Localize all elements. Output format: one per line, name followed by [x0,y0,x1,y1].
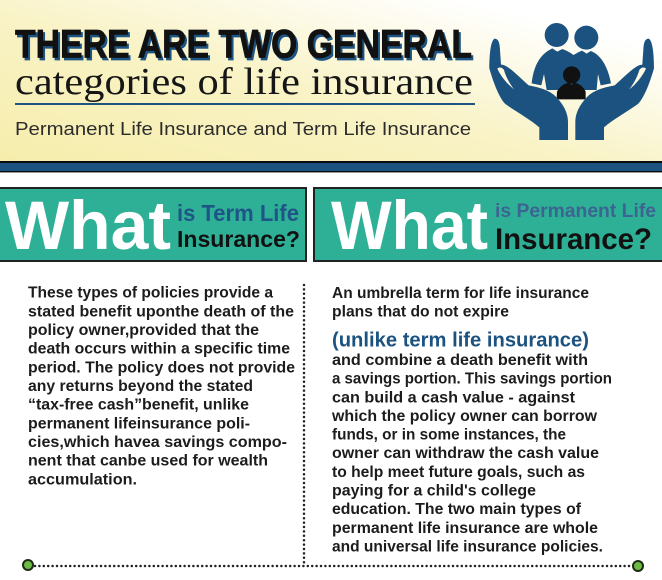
icon: family held in hands [489,23,654,140]
text block: permanent life description: to help meet future goals, such as [332,464,585,481]
panel: what is term life insurance: What [5,187,171,264]
title: THERE ARE TWO GENERAL [17,25,474,69]
text block: permanent life description: An umbrella term for life insurance [332,285,589,302]
left green dot [23,560,33,570]
text block: permanent life description: education. The two main types of [332,501,582,518]
text block: term life description: nent that canbe used for wealth [28,453,268,470]
text block: term life description: period. The policy does not provide [28,359,295,376]
text block: permanent life description: a savings portion. This savings portion [332,371,612,388]
vertical dotted divider [303,285,305,566]
panel: what is permanent life insurance: Insurance? [495,223,652,256]
text block: term life description: policy owner,provided that the [28,322,259,339]
text block: permanent life description: permanent life insurance are whole [332,520,598,537]
text block: term life description: These types of policies provide a [28,285,273,302]
title: THERE ARE TWO GENERAL [15,22,472,66]
right green dot [633,561,643,571]
text block: term life description: death occurs within a specific time [28,341,290,358]
title [15,22,474,103]
panel: what is term life insurance [0,187,306,264]
text block: permanent life description [331,285,612,556]
header background [0,0,662,161]
text block: term life description: any returns beyond the stated [28,378,253,395]
text block: permanent life description: owner can withdraw the cash value [332,445,599,462]
text block: permanent life description: (unlike term life insurance) [332,330,589,352]
text block: term life description: stated benefit uponthe death of the [28,303,294,320]
panel: what is permanent life insurance: What [331,187,488,264]
icon: finger highlights [497,67,646,89]
title: categories of life insurance [15,61,473,103]
text block: permanent life description: plans that do not expire [332,304,509,321]
panel: what is term life insurance: Insurance? [177,226,300,252]
text block: permanent life description: and combine a death benefit with [332,352,588,369]
text block: term life description [28,285,295,488]
icon: parents [532,23,611,90]
divider bar [0,161,662,173]
panel: what is term life insurance: is Term Life [177,200,299,226]
text block: permanent life description: can build a cash value - against [332,389,575,406]
text block: permanent life description: which the policy owner can borrow [331,408,598,425]
text block: permanent life description: and universal life insurance policies. [332,539,603,556]
title underline [15,103,475,105]
icon: child [557,66,586,99]
text block: term life description: cies,which havea savings compo- [28,434,287,451]
panel: what is permanent life insurance: is Permanent Life [495,201,656,222]
subtitle: Permanent Life Insurance and Term Life Insurance [15,118,471,139]
icon: left hand [489,39,568,140]
text block: term life description: permanent lifeinsurance poli- [28,415,250,432]
text block: term life description: “tax-free cash”benefit, unlike [28,397,249,414]
horizontal dotted divider [35,565,632,567]
text block: permanent life description: funds, or in some instances, the [332,427,566,444]
icon: right hand [575,39,654,140]
text block: permanent life description: paying for a child's college [332,483,536,500]
text block: term life description: accumulation. [28,471,137,488]
panel: what is permanent life insurance [314,187,662,264]
